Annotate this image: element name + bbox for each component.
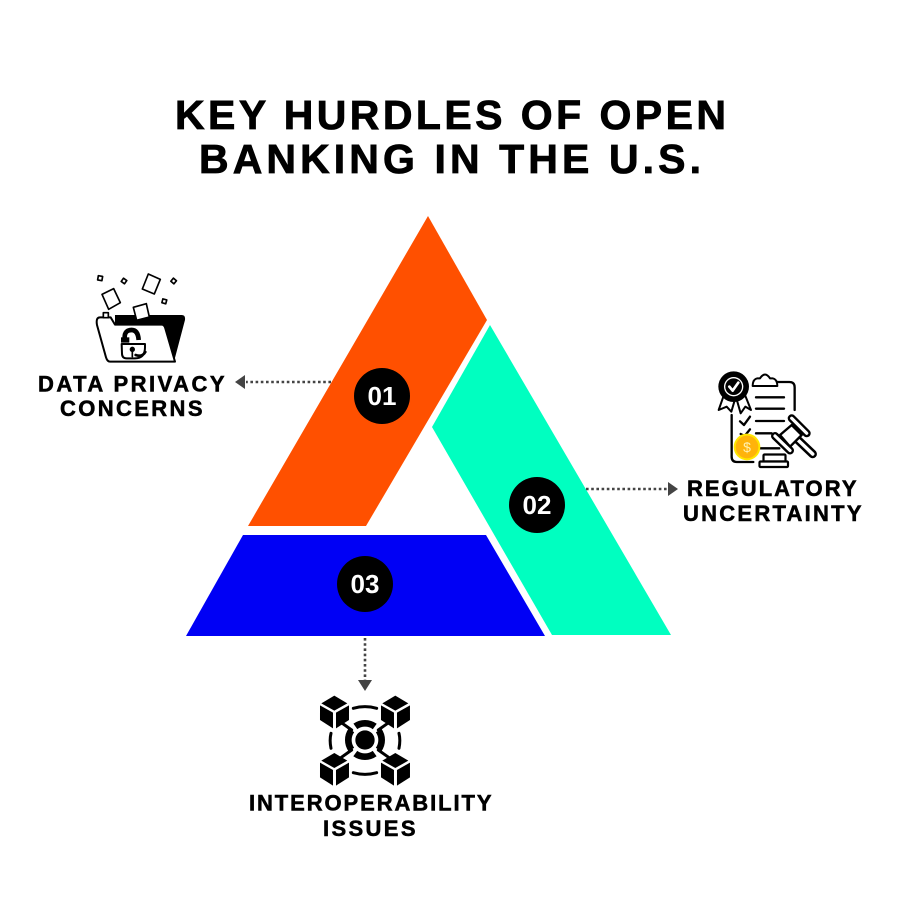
icon: connected blockchain cubes [320,696,410,786]
panel: orange triangle segment [248,216,487,526]
icon: clipboard, rosette and coin [718,371,795,462]
title: BANKING IN THE U.S. [199,136,701,182]
arrow: 03 to interoperability [358,638,372,691]
badge 03: 03 [351,569,379,599]
badge 01: 01 [368,381,396,411]
label: interoperability issues [249,790,492,841]
badge 02 [509,477,565,533]
icon: clipboard, rosette and coin: $ [743,439,751,455]
arrow: 02 to regulatory [586,482,678,496]
label: regulatory uncertainty [683,476,862,526]
label: data privacy concerns: DATA PRIVACY [38,372,225,396]
panel: teal triangle segment [432,325,671,635]
panel: blue triangle segment [186,535,545,636]
badge 02: 02 [523,490,551,520]
label: data privacy concerns: CONCERNS [60,396,202,421]
badge 01 [354,368,410,424]
label: interoperability issues: INTEROPERABILITY [249,790,492,816]
icon: gavel [760,418,813,467]
label: data privacy concerns [38,372,225,421]
title: KEY HURDLES OF OPEN [175,92,726,138]
arrow: 01 to data privacy [235,375,331,389]
badge 03 [337,556,393,612]
label: regulatory uncertainty: REGULATORY [687,476,857,501]
title [175,92,726,182]
label: interoperability issues: ISSUES [323,816,416,841]
icon: folder with unlocked padlock [97,274,185,362]
label: regulatory uncertainty: UNCERTAINTY [683,501,862,526]
